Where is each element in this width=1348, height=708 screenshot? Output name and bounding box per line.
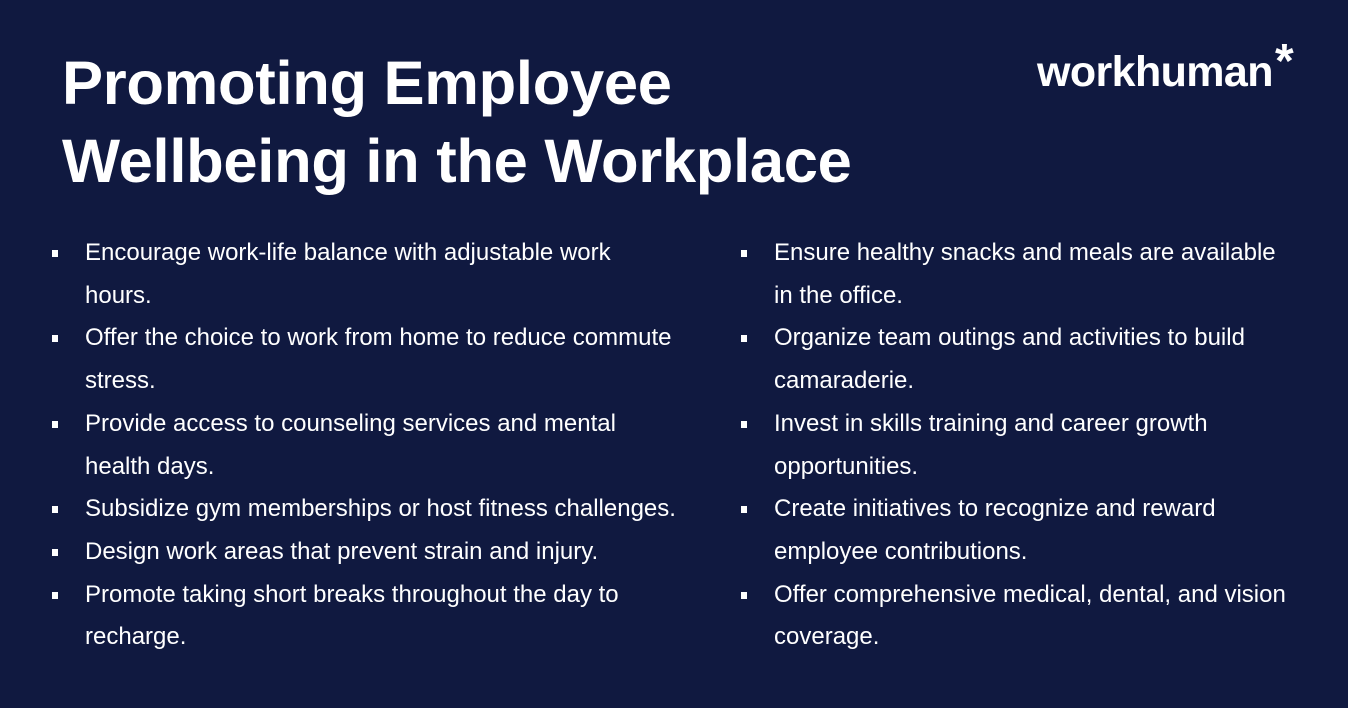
- item: [52, 317, 676, 403]
- title: Wellbeing in the Workplace: [62, 127, 852, 196]
- item: [741, 488, 1286, 574]
- item: camaraderie.: [774, 367, 914, 394]
- title: [62, 49, 852, 196]
- item: coverage.: [774, 623, 879, 650]
- item: [741, 317, 1286, 403]
- list: left column: [52, 239, 676, 650]
- item: in the office.: [774, 282, 903, 309]
- item: opportunities.: [774, 453, 918, 480]
- logo: workhuman: workhuman: [1037, 48, 1273, 96]
- item: Offer the choice to work from home to reduce commute: [85, 324, 671, 351]
- item: Subsidize gym memberships or host fitness challenges.: [85, 495, 676, 522]
- item: Design work areas that prevent strain and injury.: [85, 538, 598, 565]
- text: *: [1275, 35, 1293, 88]
- item: stress.: [85, 367, 156, 394]
- item: [52, 574, 676, 659]
- item: [52, 232, 676, 317]
- item: health days.: [85, 453, 214, 480]
- item: Offer comprehensive medical, dental, and vision: [774, 581, 1286, 608]
- item: [52, 403, 676, 488]
- item: Invest in skills training and career growth: [774, 410, 1208, 437]
- item: recharge.: [85, 623, 186, 650]
- item: Provide access to counseling services and mental: [85, 410, 616, 437]
- item: Promote taking short breaks throughout the day to: [85, 581, 619, 608]
- list: right column: [741, 239, 1286, 650]
- item: [741, 232, 1286, 317]
- item: Create initiatives to recognize and reward: [774, 495, 1216, 522]
- item: [741, 574, 1286, 659]
- item: employee contributions.: [774, 538, 1027, 565]
- item: Organize team outings and activities to build: [774, 324, 1245, 351]
- item: [741, 403, 1286, 488]
- title: Promoting Employee: [62, 49, 672, 118]
- item: hours.: [85, 282, 152, 309]
- item: Ensure healthy snacks and meals are available: [774, 239, 1276, 266]
- item: Encourage work-life balance with adjustable work: [85, 239, 611, 266]
